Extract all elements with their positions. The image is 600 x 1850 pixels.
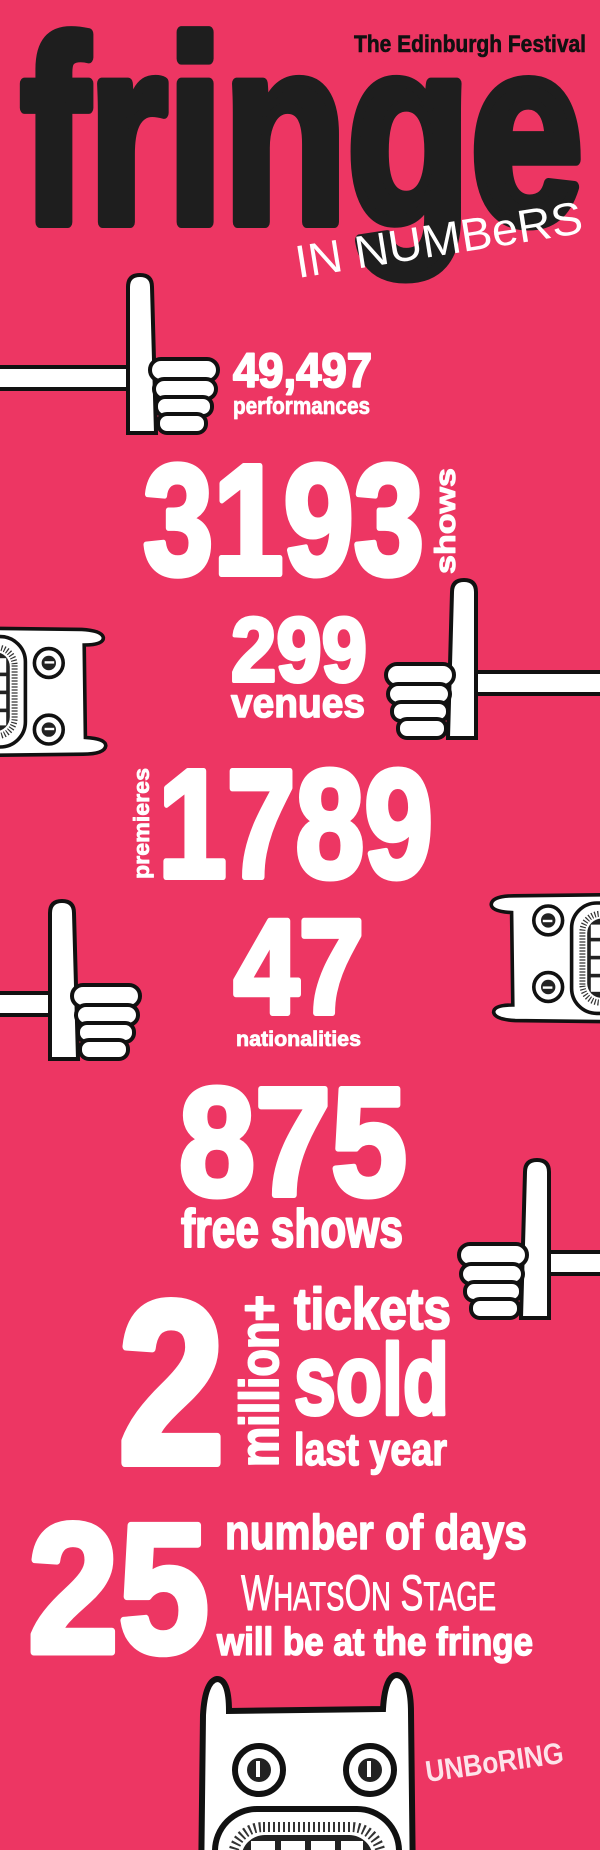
stat: 25 days WhatsOnStage at the fringe: will be at the fringe	[216, 1621, 533, 1664]
icon: monster bottom	[201, 1675, 413, 1850]
stat: 3193 shows: shows	[430, 468, 462, 574]
stat: 875 free shows: free shows	[181, 1199, 403, 1259]
stat: 2 million+ tickets sold last year	[118, 1254, 451, 1513]
icon: thumb 2	[386, 580, 600, 738]
stat: 2 million+ tickets sold last year: tickets	[294, 1277, 451, 1342]
stat: 2 million+ tickets sold last year: sold	[294, 1324, 449, 1436]
stat: 299 venues: 299	[231, 600, 367, 701]
stat: 2 million+ tickets sold last year: million+	[228, 1295, 290, 1467]
stat: 47 nationalities: 47	[234, 893, 364, 1042]
stat: 2 million+ tickets sold last year: 2	[118, 1254, 225, 1513]
icon: thumb 1	[0, 275, 218, 433]
subtitle: in numbers: IN NUMBeRS	[291, 191, 586, 288]
stat: 47 nationalities: nationalities	[236, 1028, 361, 1051]
stat: 25 days WhatsOnStage at the fringe: 25	[28, 1485, 209, 1691]
stat: 25 days WhatsOnStage at the fringe: WHATSON STAGE	[241, 1565, 496, 1621]
stat: 299 venues: venues	[231, 680, 365, 726]
stat: 25 days WhatsOnStage at the fringe	[28, 1485, 533, 1691]
icon: monster left	[0, 628, 106, 755]
stat: 3193 shows: 3193	[143, 433, 424, 608]
icon: monster right	[491, 895, 600, 1022]
stat: 1789 premieres: premieres	[129, 768, 154, 879]
stat: 49,497 performances	[233, 345, 372, 420]
stat: 875 free shows: 875	[179, 1056, 407, 1228]
icon: thumb 3	[0, 901, 140, 1059]
stat: 49,497 performances: performances	[233, 393, 370, 420]
stat: 25 days WhatsOnStage at the fringe: number of days	[225, 1506, 527, 1560]
stat: 2 million+ tickets sold last year: last year	[294, 1424, 447, 1475]
icon: thumb 4	[459, 1160, 600, 1318]
logo: unboring: UNBoRING	[423, 1737, 566, 1789]
stat: 49,497 performances: 49,497	[233, 345, 372, 398]
stat: 1789 premieres: 1789	[158, 738, 433, 910]
